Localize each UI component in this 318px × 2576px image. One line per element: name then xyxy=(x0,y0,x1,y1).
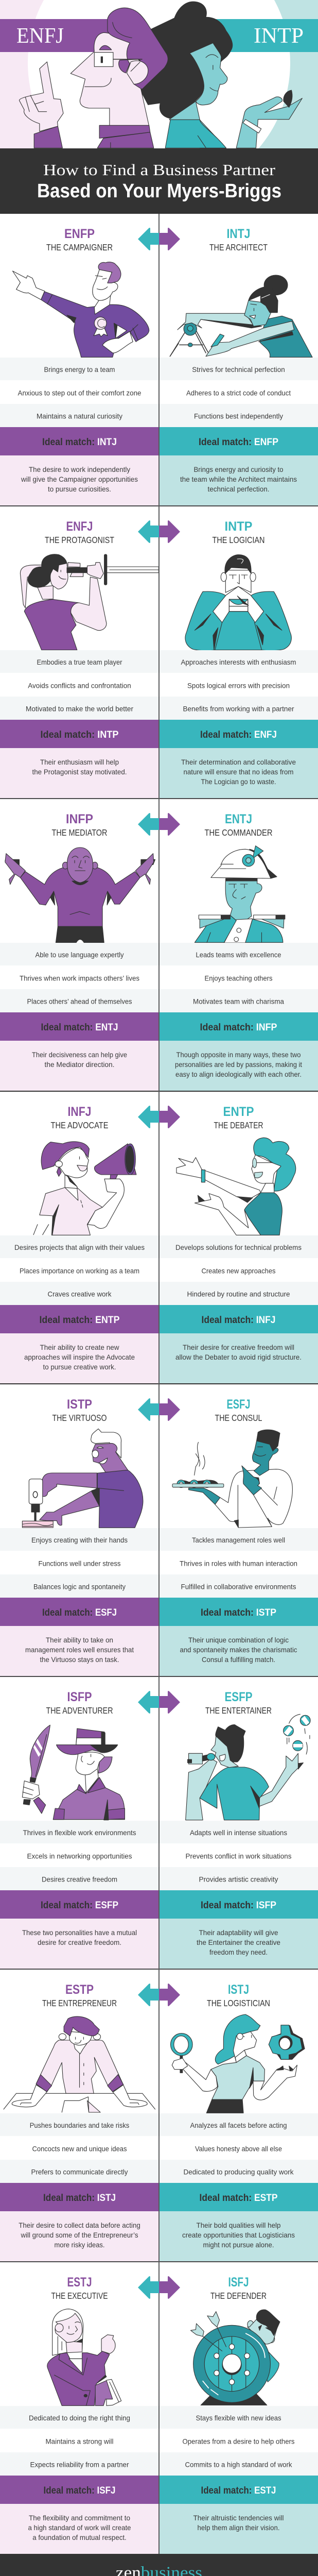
ideal match panel: ESFP: freedom they need. xyxy=(209,1948,268,1956)
ideal match panel: ENTJ: Though opposite in many ways, these two xyxy=(176,1050,301,1059)
ideal match panel: ENTP xyxy=(160,1305,318,1384)
section: ISTP and ESFJ xyxy=(0,1397,318,1677)
icon: ESTP woman at desk xyxy=(4,2016,155,2112)
ideal match panel: ESTP: Ideal match: ISTJ xyxy=(43,2193,116,2204)
icon: ISFP adventurer with machete xyxy=(22,1725,125,1820)
trait list: ESTP: Concocts new and unique ideas xyxy=(32,2144,127,2153)
section: ENFJ and INTP xyxy=(0,519,318,799)
ideal match panel: ISTJ: create opportunities that Logisticians xyxy=(182,2231,295,2239)
ideal match panel: ESTP xyxy=(0,2183,158,2262)
ideal match panel: ISFJ xyxy=(160,2476,318,2554)
ideal match panel: ENTP: Their desire for creative freedom will xyxy=(183,1343,294,1351)
trait list: ESFJ: Tackles management roles well xyxy=(192,1536,285,1544)
ideal match panel: ISFP: desire for creative freedom. xyxy=(38,1938,121,1946)
personality heading: ESFJ xyxy=(215,1397,262,1423)
trait list: INFP: Places others’ ahead of themselves xyxy=(27,997,132,1006)
title banner xyxy=(0,148,318,214)
trait list: ISFJ: Commits to a high standard of work xyxy=(185,2461,292,2469)
ideal match panel: INTP: The Logician go to waste. xyxy=(201,777,276,786)
personality heading: ISTJ xyxy=(207,1982,270,2008)
trait list: ENTP: Hindered by routine and structure xyxy=(187,1290,290,1298)
personality heading: INFP: INFP xyxy=(66,812,93,826)
trait list: ENTJ: Motivates team with charisma xyxy=(193,997,284,1006)
trait list: ENFP xyxy=(0,358,158,427)
section: INFJ and ENTP xyxy=(0,1105,318,1384)
arrow: INFJ and ENTP xyxy=(138,1106,180,1128)
ideal match panel: ENTJ: easy to align ideologically with each other. xyxy=(175,1070,302,1078)
trait list: ENTJ: Leads teams with excellence xyxy=(196,951,281,959)
trait list: ESFJ xyxy=(160,1528,318,1598)
trait list: ENTJ xyxy=(160,943,318,1012)
ideal match panel: ISTP xyxy=(0,1598,158,1676)
trait list: INTP: Spots logical errors with precision xyxy=(187,681,290,689)
personality heading: ESTJ: ESTJ xyxy=(67,2275,92,2290)
personality heading: ENFJ: THE PROTAGONIST xyxy=(45,535,114,545)
ideal match panel: ENFP: will give the Campaigner opportunities xyxy=(21,475,138,483)
trait list: ENFJ: Avoids conflicts and confrontation xyxy=(28,681,131,689)
ideal match panel: ESFP xyxy=(160,1890,318,1969)
ideal match panel: ESTP: Their desire to collect data before acting xyxy=(19,2221,140,2229)
trait list: ESTJ: Expects reliability from a partner xyxy=(30,2461,129,2469)
trait list: ENTP: Develops solutions for technical problems xyxy=(175,1243,302,1251)
trait list: ISTP: Balances logic and spontaneity xyxy=(33,1583,126,1591)
ideal match panel: INTP: Their determination and collaborative xyxy=(181,758,296,766)
ideal match panel: ESFP: the Entertainer the creative xyxy=(197,1938,280,1946)
icon: INFP man shrugging xyxy=(5,848,155,943)
ideal match panel: INFP: the Mediator direction. xyxy=(44,1060,114,1069)
trait list: INFP: Able to use language expertly xyxy=(35,951,123,959)
ideal match panel: INTP: nature will ensure that no ideas from xyxy=(183,768,293,776)
ideal match panel: ENTJ xyxy=(160,1012,318,1091)
icon: INTP man with steepled hands xyxy=(185,555,291,651)
trait list: ESFP: Provides artistic creativity xyxy=(199,1875,278,1884)
personality heading: INFJ: INFJ xyxy=(68,1105,92,1119)
arrow: ENFP and INTJ xyxy=(138,228,180,250)
ideal match panel: ENTP: allow the Debater to avoid rigid structure. xyxy=(175,1353,302,1361)
personality heading: ISFP xyxy=(46,1690,113,1716)
ideal match panel: ESTJ xyxy=(0,2476,158,2554)
trait list: ESTJ: Maintains a strong will xyxy=(45,2437,113,2445)
icon: ESTJ executive woman xyxy=(47,2309,121,2405)
trait list: ENTJ: Enjoys teaching others xyxy=(205,974,273,982)
ideal match panel: ISFP: Ideal match: ESFP xyxy=(41,1900,118,1911)
personality heading: ENTJ: ENTJ xyxy=(225,812,252,826)
ideal match panel: INTP: Ideal match: ENFJ xyxy=(200,730,277,740)
trait list: ENTP: Creates new approaches xyxy=(202,1266,276,1275)
ideal match panel: INTJ: the team while the Architect maintains xyxy=(180,475,297,483)
ideal match panel: INFP: Their decisiveness can help give xyxy=(32,1050,127,1059)
title line two: Based on Your Myers-Briggs xyxy=(37,180,281,202)
personality heading: ENFP xyxy=(46,227,113,252)
ideal match panel: INTJ: Brings energy and curiosity to xyxy=(193,465,284,473)
ideal match panel: INFJ: to pursue creative work. xyxy=(43,1363,116,1371)
ideal match panel: ESTJ: The flexibility and commitment to xyxy=(29,2514,130,2522)
trait list: ESTP xyxy=(0,2113,158,2183)
icon: woman and man in profile xyxy=(19,2,302,148)
ideal match panel: ISTJ: Ideal match: ESTP xyxy=(200,2193,278,2204)
personality heading: ISFP: THE ADVENTURER xyxy=(46,1705,113,1716)
title line one: How to Find a Business Partner xyxy=(43,161,276,179)
trait list: ISFJ xyxy=(160,2406,318,2476)
ideal match panel: ESFJ: Ideal match: ISTP xyxy=(201,1607,276,1618)
personality heading: INFP: THE MEDIATOR xyxy=(51,827,107,838)
trait list: INFJ: Desires projects that align with their values xyxy=(14,1243,145,1251)
trait list: ISTP: Enjoys creating with their hands xyxy=(31,1536,128,1544)
ideal match panel: ISFJ: Ideal match: ESTJ xyxy=(201,2485,276,2496)
trait list: ISTJ xyxy=(160,2113,318,2183)
icon: ISFJ defender behind shield xyxy=(191,2310,280,2405)
personality heading: ESTJ xyxy=(51,2275,108,2301)
ideal match panel: ESFP: Their adaptability will give xyxy=(199,1928,278,1937)
trait list: INTJ xyxy=(160,358,318,427)
icon: INTJ woman with compass xyxy=(170,275,312,357)
personality heading: ENTP: THE DEBATER xyxy=(214,1120,263,1130)
arrow: INFP and ENTJ xyxy=(138,813,180,836)
personality heading: ISFJ: THE DEFENDER xyxy=(210,2291,267,2301)
personality heading: ISTP: ISTP xyxy=(67,1397,92,1412)
personality heading: INTJ: INTJ xyxy=(226,227,250,241)
personality heading: INFP xyxy=(51,812,107,838)
ideal match panel: ENFP: The desire to work independently xyxy=(29,465,130,473)
trait list: ESFJ: Fulfilled in collaborative environments xyxy=(181,1583,296,1591)
arrow: ISTP and ESFJ xyxy=(138,1398,180,1421)
personality heading: ISTJ: ISTJ xyxy=(228,1982,249,1997)
personality heading: ESFJ: THE CONSUL xyxy=(215,1413,262,1423)
personality heading: ENTP: ENTP xyxy=(223,1105,254,1119)
section: ISFP and ESFP xyxy=(0,1690,318,1970)
footer xyxy=(0,2554,318,2576)
ideal match panel: INFJ: approaches will inspire the Advocate xyxy=(24,1353,135,1361)
personality heading: INTP xyxy=(212,519,264,545)
ideal match panel: INFJ xyxy=(0,1305,158,1384)
trait list: INTJ: Adheres to a strict code of conduct xyxy=(186,388,291,397)
trait list: INTP: Approaches interests with enthusiasm xyxy=(181,658,296,666)
trait list: INFJ: Craves creative work xyxy=(47,1290,112,1298)
personality heading: ESTP: THE ENTREPRENEUR xyxy=(42,1998,117,2008)
personality heading: ISTP: THE VIRTUOSO xyxy=(52,1413,107,1423)
personality heading: ESTP xyxy=(42,1982,117,2008)
ideal match panel: ENFJ xyxy=(0,720,158,799)
ideal match panel: ISTJ: Their bold qualities will help xyxy=(197,2221,281,2229)
trait list: ESFJ: Thrives in roles with human interaction xyxy=(180,1559,297,1567)
trait list: INTJ: Functions best independently xyxy=(194,412,283,420)
ideal match panel: INFJ: Ideal match: ENTP xyxy=(39,1315,120,1326)
trait list: ISFP xyxy=(0,1821,158,1890)
trait list: ISFP: Desires creative freedom xyxy=(42,1875,117,1884)
ideal match panel: INTJ xyxy=(160,427,318,506)
personality heading: ESTJ: THE EXECUTIVE xyxy=(51,2291,108,2301)
section: INFP and ENTJ xyxy=(0,812,318,1092)
ideal match panel: ISTP: management roles well ensures that xyxy=(25,1646,134,1654)
ideal match panel: ENFJ: Their enthusiasm will help xyxy=(40,758,119,766)
personality heading: INTP: INTP xyxy=(224,519,252,534)
ideal match panel: INFJ: Their ability to create new xyxy=(40,1343,119,1351)
ideal match panel: ESTJ: a foundation of mutual respect. xyxy=(32,2533,127,2541)
trait list: INFJ xyxy=(0,1235,158,1305)
trait list: ESFP: Prevents conflict in work situations xyxy=(185,1852,291,1860)
icon: ESFP entertainer juggling xyxy=(186,1714,310,1820)
ideal match panel: ESFJ: Their unique combination of logic xyxy=(188,1636,289,1644)
trait list: ISFP: Thrives in flexible work environments xyxy=(23,1828,136,1837)
personality heading: ESFP: ESFP xyxy=(224,1690,252,1704)
ideal match panel: INTJ: technical perfection. xyxy=(208,485,270,493)
ideal match panel: ESTJ: Ideal match: ISFJ xyxy=(43,2485,115,2496)
personality heading: ENFJ xyxy=(45,519,114,545)
trait list: ENFJ: Motivated to make the world better xyxy=(26,705,133,713)
arrow: ESTJ and ISFJ xyxy=(138,2276,180,2299)
ideal match panel: ISTP: Their ability to take on xyxy=(46,1636,113,1644)
ideal match panel: INTJ: Ideal match: ENFP xyxy=(199,437,278,448)
trait list: ESTJ: Dedicated to doing the right thing xyxy=(29,2414,130,2422)
header label: INTP: INTP xyxy=(254,24,304,48)
trait list: ISTJ: Dedicated to producing quality work xyxy=(183,2168,294,2176)
arrow: ESTP and ISTJ xyxy=(138,1984,180,2006)
trait list: ENFP: Maintains a natural curiosity xyxy=(37,412,122,420)
ideal match panel: ENFP: to pursue curiosities. xyxy=(48,485,111,493)
trait list: INFP xyxy=(0,943,158,1012)
trait list: ESFP xyxy=(160,1821,318,1890)
trait list: INFJ: Places importance on working as a team xyxy=(20,1266,139,1275)
ideal match panel: ESFJ: and spontaneity makes the charismatic xyxy=(180,1646,297,1654)
ideal match panel: ENFJ: Ideal match: INTP xyxy=(41,730,119,740)
personality heading: ENFP: THE CAMPAIGNER xyxy=(46,242,113,252)
personality heading: INFJ xyxy=(50,1105,108,1130)
ideal match panel: INTP xyxy=(160,720,318,799)
ideal match panel: ESTJ: a high standard of work will create xyxy=(28,2523,131,2532)
trait list: ISTP: Functions well under stress xyxy=(38,1559,120,1567)
personality heading: ISTJ: THE LOGISTICIAN xyxy=(207,1998,270,2008)
icon: ENTJ commander in helmet xyxy=(195,846,285,943)
trait list: ENFP: Brings energy to a team xyxy=(44,365,115,374)
trait list: ENFP: Anxious to step out of their comfort zone xyxy=(17,388,142,397)
trait list: INTP xyxy=(160,650,318,720)
personality heading: ISFJ: ISFJ xyxy=(228,2275,249,2290)
ideal match panel: ENFP xyxy=(0,427,158,506)
trait list: ISTJ: Analyzes all facets before acting xyxy=(190,2121,287,2129)
personality heading: INTJ xyxy=(209,227,268,252)
trait list: ISTJ: Values honesty above all else xyxy=(195,2144,282,2153)
section: ENFP and INTJ xyxy=(0,227,318,506)
ideal match panel: ISTP: the Virtuoso stays on task. xyxy=(40,1655,119,1664)
icon: INFJ woman with megaphone xyxy=(33,1142,136,1235)
trait list: ESFP: Adapts well in intense situations xyxy=(190,1828,287,1837)
personality heading: ISFP: ISFP xyxy=(67,1690,92,1704)
personality heading: ENTJ xyxy=(205,812,273,838)
icon: ENTP woman gesturing xyxy=(176,1138,296,1235)
personality heading: ISTP xyxy=(52,1397,107,1423)
ideal match panel: ENTJ: Ideal match: INFP xyxy=(200,1022,277,1033)
trait list: ESTP: Prefers to communicate directly xyxy=(31,2168,128,2176)
ideal match panel: INFP: Ideal match: ENTJ xyxy=(41,1022,118,1033)
ideal match panel: ISFJ: help them align their vision. xyxy=(198,2523,280,2532)
trait list: ESTP: Pushes boundaries and take risks xyxy=(30,2121,129,2129)
ideal match panel: ESTP: more risky ideas. xyxy=(55,2241,105,2249)
trait list: ISFP: Excels in networking opportunities xyxy=(27,1852,132,1860)
trait list: ENFJ xyxy=(0,650,158,720)
trait list: ESTJ xyxy=(0,2406,158,2476)
section: ESTJ and ISFJ xyxy=(0,2275,318,2554)
icon: ENFP pointing man xyxy=(12,262,149,357)
icon: ESFJ man with tray xyxy=(172,1430,292,1528)
trait list: INTP: Benefits from working with a partner xyxy=(183,705,294,713)
ideal match panel: ISTJ: might not pursue alone. xyxy=(203,2241,274,2249)
personality heading: INTP: THE LOGICIAN xyxy=(212,535,264,545)
personality heading: ESTP: ESTP xyxy=(65,1982,94,1997)
ideal match panel: ESTP: will ground some of the Entrepreneur’s xyxy=(21,2231,138,2239)
ideal match panel: ENFP: Ideal match: INTJ xyxy=(42,437,117,448)
trait list: ISTP xyxy=(0,1528,158,1598)
personality heading: INTJ: THE ARCHITECT xyxy=(209,242,268,252)
icon: ENFJ woman with telescope xyxy=(20,554,158,650)
trait list: INFP: Thrives when work impacts others’ lives xyxy=(20,974,139,982)
trait list: ISFJ: Operates from a desire to help others xyxy=(182,2437,294,2445)
icon: ISTP man drilling xyxy=(22,1429,143,1528)
ideal match panel: ESFJ xyxy=(160,1598,318,1676)
trait list: ENFJ: Embodies a true team player xyxy=(37,658,122,666)
personality heading: ESFJ: ESFJ xyxy=(226,1397,250,1412)
ideal match panel: ISFP: These two personalities have a mutual xyxy=(22,1928,137,1937)
trait list: INTJ: Strives for technical perfection xyxy=(192,365,285,374)
personality heading: ENFJ: ENFJ xyxy=(66,519,93,534)
ideal match panel: ESFJ: Consul a fulfilling match. xyxy=(202,1655,275,1664)
personality heading: INFJ: THE ADVOCATE xyxy=(50,1120,108,1130)
trait list: ISFJ: Stays flexible with new ideas xyxy=(196,2414,281,2422)
personality heading: ESFP: THE ENTERTAINER xyxy=(205,1705,272,1716)
section: ESTP and ISTJ xyxy=(0,1982,318,2262)
ideal match panel: ENTJ: personalities are led by passions, making it xyxy=(175,1060,302,1069)
ideal match panel: ENTP: Ideal match: INFJ xyxy=(202,1315,276,1326)
trait list: ENTP xyxy=(160,1235,318,1305)
ideal match panel: ISFP xyxy=(0,1890,158,1969)
header label: ENFJ: ENFJ xyxy=(16,24,64,48)
ideal match panel: ISTP: Ideal match: ESFJ xyxy=(42,1607,117,1618)
icon: ISTJ woman with magnifier and gear xyxy=(170,2014,305,2113)
ideal match panel: INFP xyxy=(0,1012,158,1091)
personality heading: ENTJ: THE COMMANDER xyxy=(205,827,273,838)
personality heading: ENFP: ENFP xyxy=(64,227,95,241)
arrow: ISFP and ESFP xyxy=(138,1691,180,1714)
ideal match panel: ESFP: Ideal match: ISFP xyxy=(201,1900,276,1911)
personality heading: ESFP xyxy=(205,1690,272,1716)
ideal match panel: ISFJ: Their altruistic tendencies will xyxy=(193,2514,284,2522)
arrow: ENFJ and INTP xyxy=(138,520,180,543)
ideal match panel: ISTJ xyxy=(160,2183,318,2262)
personality heading: ENTP xyxy=(214,1105,263,1130)
personality heading: ISFJ xyxy=(210,2275,267,2301)
header illustration xyxy=(0,0,318,194)
ideal match panel: ENFJ: the Protagonist stay motivated. xyxy=(32,768,127,776)
